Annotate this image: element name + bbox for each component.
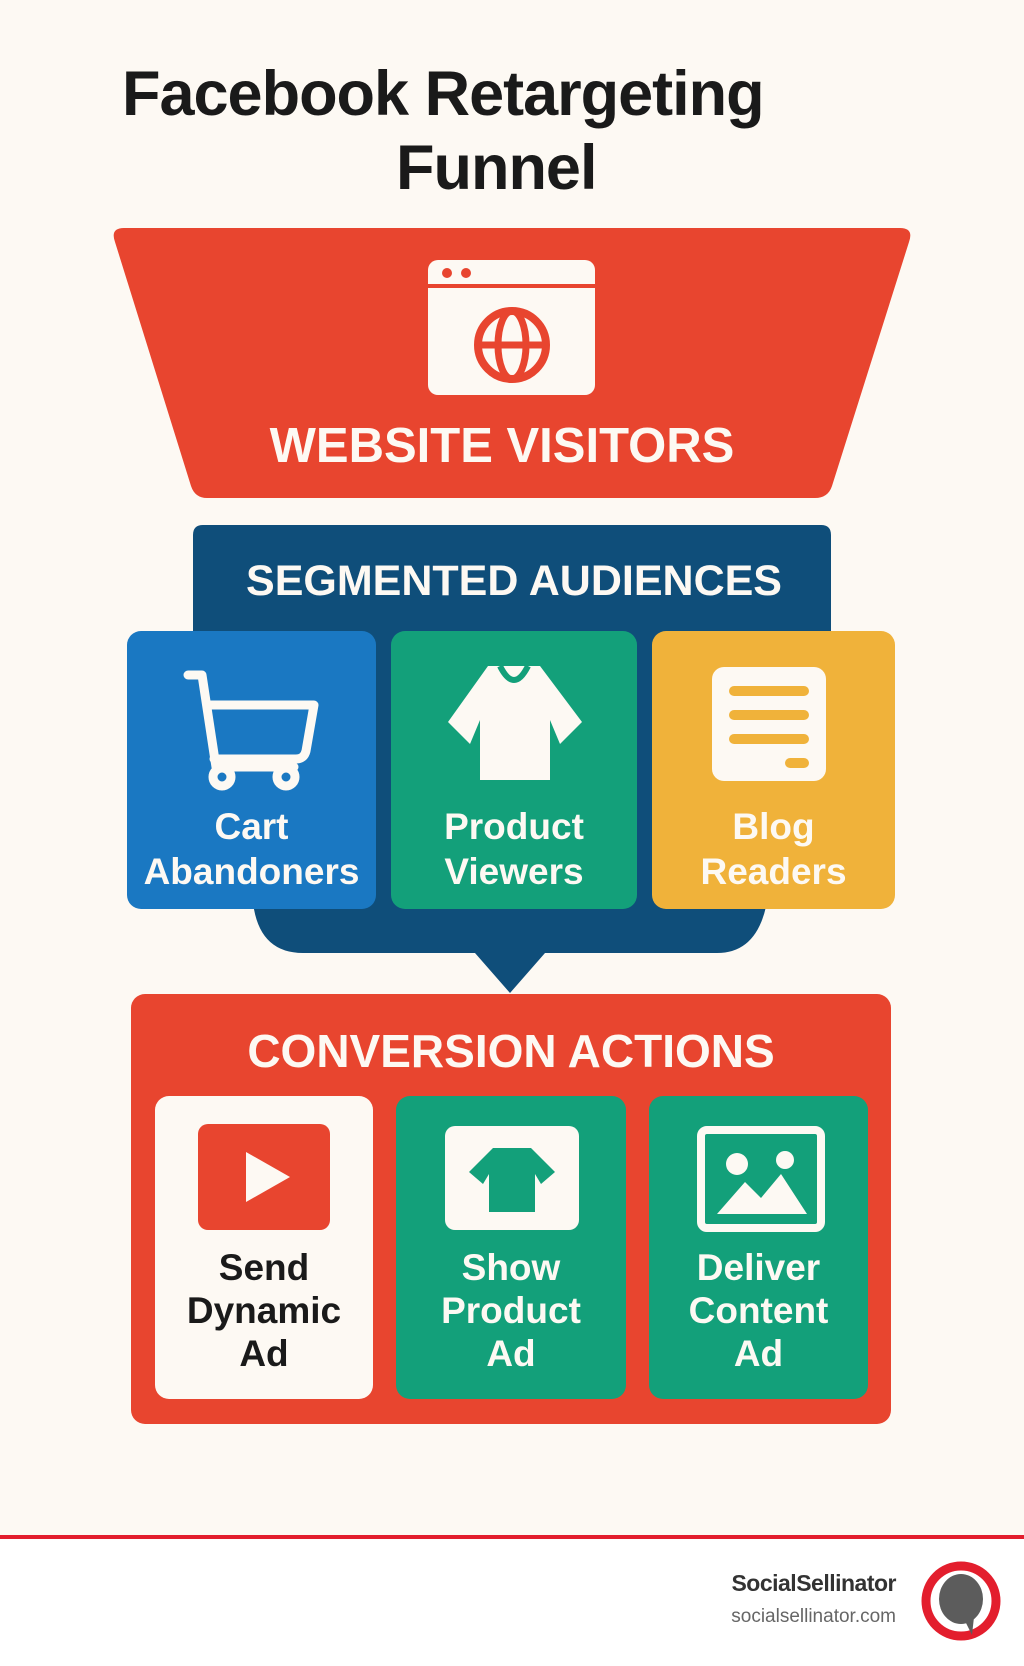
card: show product ad <box>396 1096 626 1399</box>
heading: segmented audiences: SEGMENTED AUDIENCES <box>246 557 782 605</box>
card: cart abandoners: Cart <box>214 806 289 847</box>
icon: shirt box <box>445 1126 579 1230</box>
card: cart abandoners <box>127 631 376 909</box>
title: Facebook Retargeting <box>122 59 764 129</box>
icon: logo <box>922 1562 1000 1640</box>
card: cart abandoners: Abandoners <box>144 851 359 892</box>
icon: cart <box>184 670 318 790</box>
card: send dynamic ad: Send <box>219 1247 309 1288</box>
card: show product ad: Show <box>462 1247 560 1288</box>
card: product viewers <box>391 631 637 909</box>
card: blog readers <box>652 631 895 909</box>
icon: browser globe <box>428 260 595 395</box>
icon: image <box>697 1126 825 1232</box>
card: show product ad: Product <box>441 1290 581 1331</box>
panel: website visitors funnel <box>114 228 910 498</box>
heading: conversion actions: CONVERSION ACTIONS <box>247 1025 775 1077</box>
card: product viewers: Product <box>444 806 584 847</box>
card: send dynamic ad: Dynamic <box>187 1290 341 1331</box>
panel: conversion actions <box>131 994 891 1424</box>
heading: website visitors: WEBSITE VISITORS <box>270 419 734 473</box>
panel: segmented audiences <box>127 525 895 993</box>
card: deliver content ad: Deliver <box>697 1247 820 1288</box>
card: deliver content ad: Ad <box>734 1333 783 1374</box>
footer <box>0 1535 1024 1666</box>
card: deliver content ad: Content <box>689 1290 828 1331</box>
card: blog readers: Readers <box>700 851 847 892</box>
card: product viewers: Viewers <box>444 851 584 892</box>
card: blog readers: Blog <box>732 806 815 847</box>
card: send dynamic ad <box>155 1096 373 1399</box>
icon: document <box>712 667 826 781</box>
card: show product ad: Ad <box>486 1333 536 1374</box>
footer brand text <box>731 1570 896 1627</box>
icon: t-shirt <box>448 666 582 780</box>
icon: play video <box>198 1124 330 1230</box>
footer brand text: socialsellinator.com <box>731 1606 896 1627</box>
title: Funnel <box>396 133 596 203</box>
title <box>122 59 764 203</box>
card: send dynamic ad: Ad <box>239 1333 289 1374</box>
footer brand text: SocialSellinator <box>731 1570 896 1596</box>
card: deliver content ad <box>649 1096 868 1399</box>
